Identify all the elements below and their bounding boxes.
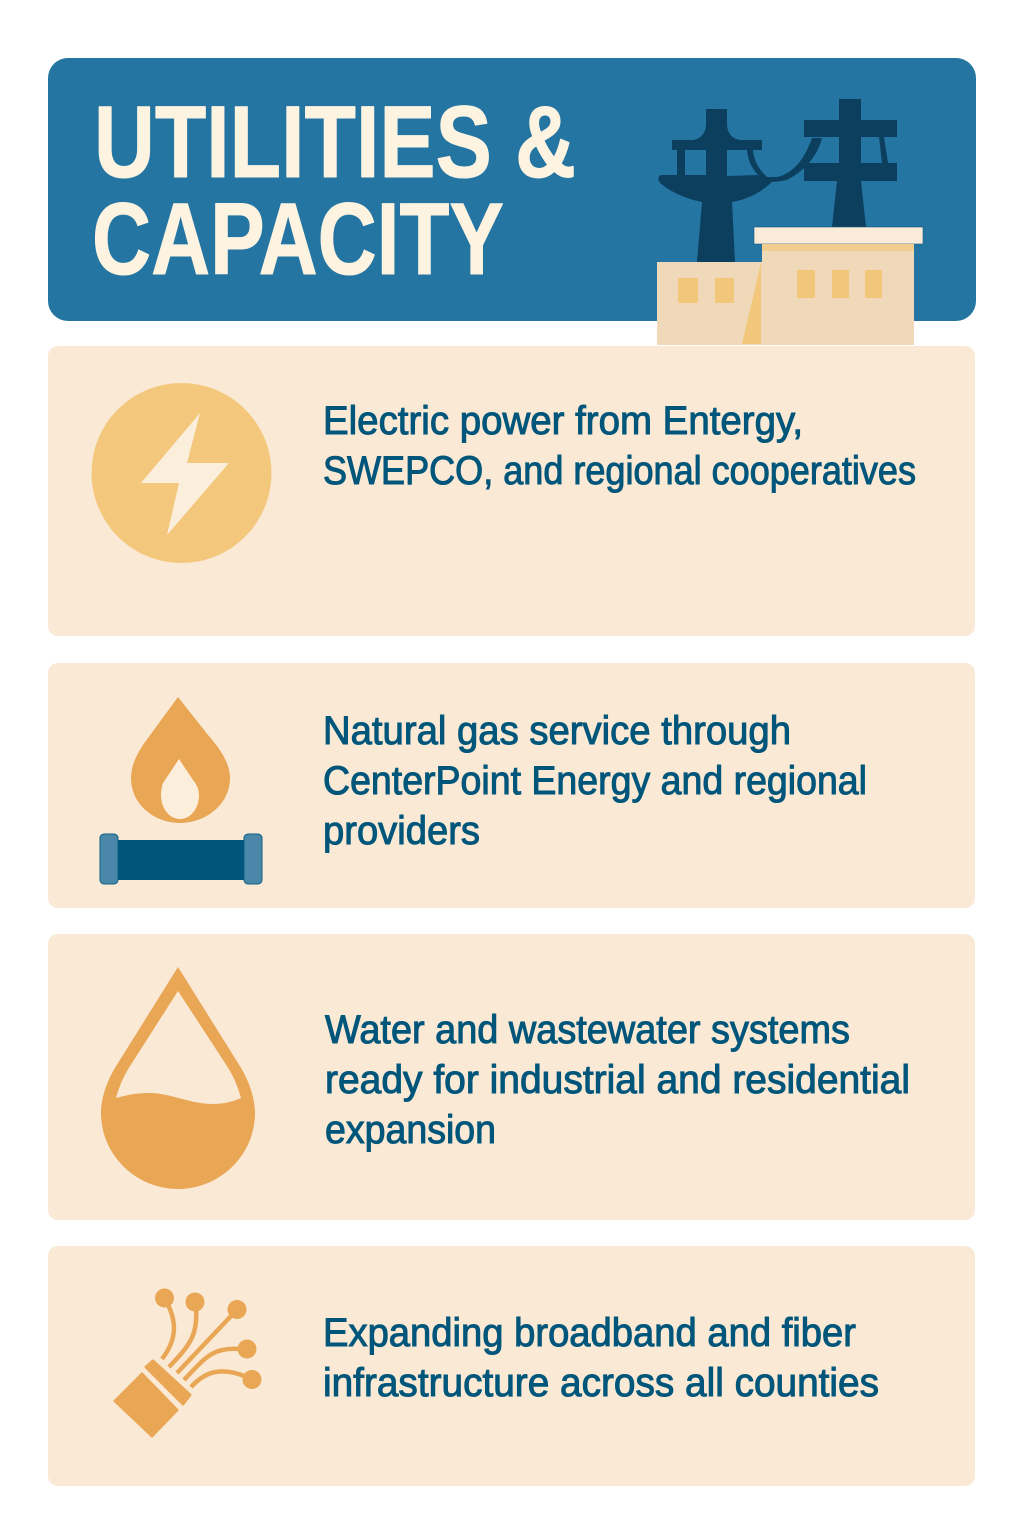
text: water: expansion (325, 1108, 496, 1152)
text: electric (323, 399, 916, 493)
text: gas: CenterPoint Energy and regional (323, 759, 867, 803)
icon: water drop (101, 967, 255, 1189)
title (92, 85, 576, 296)
text: water: ready for industrial and residential (325, 1058, 910, 1102)
icon: buildings (657, 227, 923, 345)
title: UTILITIES & (94, 85, 576, 199)
text: broadband: Expanding broadband and fiber (323, 1311, 856, 1355)
text: broadband (323, 1311, 879, 1405)
text: broadband: infrastructure across all counties (323, 1361, 879, 1405)
icon: fiber cable (113, 1288, 262, 1438)
icon: lightning bolt (92, 383, 272, 563)
text: electric: SWEPCO, and regional cooperatives (323, 449, 916, 493)
text: electric: Electric power from Entergy, (323, 399, 803, 443)
icon: power towers (658, 99, 897, 262)
panel: natural gas (48, 663, 975, 908)
panel: electric power (48, 346, 975, 636)
header banner (48, 58, 976, 345)
text: water (325, 1008, 910, 1152)
text: gas: Natural gas service through (323, 709, 791, 753)
text: water: Water and wastewater systems (325, 1008, 850, 1052)
panel: water (48, 934, 975, 1220)
panel: broadband (48, 1246, 975, 1486)
text: gas (323, 709, 867, 853)
text: gas: providers (323, 809, 480, 853)
icon: gas flame on pipe (100, 697, 262, 884)
title: CAPACITY (92, 182, 504, 296)
